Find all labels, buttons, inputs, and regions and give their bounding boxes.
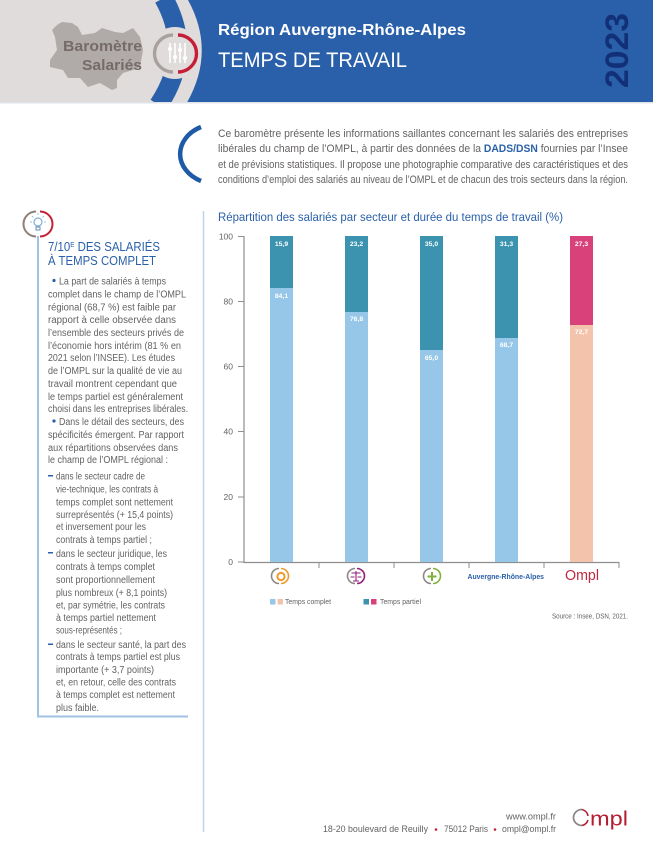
sidebar text: dans le secteur juridique, les — [56, 549, 167, 560]
footer contact — [323, 812, 557, 835]
bar: santé: 65,0 — [425, 355, 438, 362]
header title: theme: TEMPS DE TRAVAIL — [218, 49, 407, 72]
icon: region map — [50, 22, 143, 90]
sidebar text: temps complet sont nettement — [56, 498, 173, 508]
bar chart — [219, 232, 619, 584]
y axis labels: 40 — [224, 426, 233, 436]
legend: Temps complet — [285, 599, 331, 606]
sidebar text: plus faible. — [56, 703, 99, 714]
bar: cadre de vie-technique: 84,1 — [275, 293, 288, 300]
sidebar heading: À TEMPS COMPLET — [48, 253, 156, 268]
sidebar text: importante (+ 3,7 points) — [56, 665, 154, 676]
bar: cadre de vie-technique: 15,9 — [275, 241, 288, 248]
header banner — [0, 0, 653, 105]
y axis labels: 20 — [224, 492, 233, 502]
axes — [238, 236, 619, 568]
sidebar text: sont proportionnellement — [56, 575, 155, 586]
header title: region: Région Auvergne-Rhône-Alpes — [218, 22, 466, 39]
sidebar text: et inversement pour les — [56, 522, 146, 533]
sidebar text: surreprésentés (+ 15,4 points) — [56, 510, 173, 521]
y axis labels: 0 — [228, 557, 233, 567]
y axis labels: 100 — [219, 232, 233, 242]
sidebar text: à temps partiel nettement — [56, 613, 156, 624]
year: 2023 — [599, 13, 635, 88]
sidebar text: le temps partiel est généralement — [48, 392, 183, 403]
legend — [270, 599, 421, 606]
x label: Auvergne-Rhône-Alpes: Auvergne-Rhône-Alpes — [468, 572, 544, 581]
bar: santé — [420, 236, 443, 562]
sidebar text: l’ensemble des secteurs privés de — [48, 328, 185, 339]
intro arc — [180, 127, 201, 181]
sidebar text: rapport à celle observée dans — [48, 315, 176, 326]
footer contact: 75012 Paris — [444, 824, 488, 835]
intro paragraph — [218, 128, 628, 186]
sidebar text: sous-représentés ; — [56, 626, 122, 636]
text: Baromètre Salariés: Salariés — [82, 58, 142, 74]
footer contact: www.ompl.fr — [505, 812, 557, 822]
bar: Auvergne-Rhône-Alpes — [495, 236, 518, 562]
text: Baromètre Salariés — [63, 39, 142, 74]
icon: sector juridique — [348, 568, 365, 584]
sidebar text — [48, 276, 188, 714]
sidebar text: et, par symétrie, les contrats — [56, 600, 165, 612]
icon: sector cadre de vie — [272, 568, 288, 584]
sidebar text: de l’OMPL sur la qualité de vie au — [48, 366, 182, 377]
sidebar text: dans le secteur santé, la part des — [56, 640, 186, 651]
y axis labels: 80 — [224, 296, 233, 306]
OMPL logo: mpl — [590, 808, 628, 830]
bar: OMPL: 27,3 — [575, 241, 588, 248]
icon: barometer emblem — [154, 35, 197, 72]
sidebar text: l’économie hors intérim (81 % en — [48, 341, 181, 352]
sidebar text: complet dans le champ de l’OMPL — [48, 290, 187, 300]
bar: juridique — [345, 236, 368, 562]
OMPL logo — [574, 808, 628, 830]
sidebar heading: E — [70, 242, 75, 249]
sidebar text: Dans le détail des secteurs, des — [59, 417, 184, 428]
sidebar text: 2021 selon l’INSEE). Les études — [48, 353, 175, 364]
sidebar text: vie-technique, les contrats à — [56, 484, 158, 496]
source: Source : Insee, DSN, 2021. — [552, 614, 628, 620]
intro paragraph: libérales du champ de l’OMPL, à partir des données de la DADS/DSN fournies par l’Insee — [218, 143, 628, 155]
sidebar heading: 7/10 — [48, 240, 73, 254]
sidebar text: choisi dans les entreprises libérales. — [48, 404, 188, 415]
sidebar heading: DES SALARIÉS — [74, 239, 160, 254]
sidebar text: travail montrent cependant que — [48, 379, 178, 390]
bar: santé: 35,0 — [425, 241, 438, 248]
bar: OMPL — [570, 236, 593, 562]
column divider — [202, 211, 204, 832]
sidebar text: contrats à temps complet — [56, 562, 155, 573]
icon: sector santé — [424, 568, 441, 584]
bar: juridique: 76,8 — [350, 316, 363, 323]
sidebar text: plus nombreux (+ 8,1 points) — [56, 588, 167, 599]
text: Baromètre Salariés: Baromètre — [63, 39, 142, 55]
sidebar text: dans le secteur cadre de — [56, 472, 145, 482]
sidebar heading — [48, 239, 160, 268]
x label: OMPL logo: Ompl — [565, 567, 599, 584]
y axis labels: 60 — [224, 362, 233, 372]
footer — [323, 808, 628, 835]
chart title: Répartition des salariés par secteur et durée du temps de travail (%) — [218, 210, 563, 224]
sidebar text: à temps complet est nettement — [56, 690, 175, 701]
intro paragraph: Ce baromètre présente les informations saillantes concernant les salariés des entreprises — [218, 128, 628, 140]
bar: Auvergne-Rhône-Alpes: 68,7 — [500, 342, 513, 349]
icon: light bulb — [23, 212, 52, 236]
y axis labels — [219, 232, 233, 567]
panel: sidebar — [23, 212, 188, 716]
legend: Temps partiel — [380, 599, 421, 606]
bar: OMPL: 72,7 — [575, 329, 588, 336]
sidebar text: régional (68,7 %) est faible par — [48, 302, 177, 314]
sidebar text: La part de salariés à temps — [59, 276, 166, 288]
sidebar text: aux répartitions observées dans — [48, 443, 178, 454]
sidebar text: le champ de l’OMPL régional : — [48, 455, 168, 466]
footer contact: ompl@ompl.fr — [502, 824, 557, 835]
sidebar text: et, en retour, celle des contrats — [56, 678, 176, 688]
sidebar text: contrats à temps partiel est plus — [56, 652, 180, 663]
bar: cadre de vie-technique — [270, 236, 293, 562]
bar: juridique: 23,2 — [350, 241, 363, 248]
sidebar text: contrats à temps partiel ; — [56, 535, 152, 546]
bar: Auvergne-Rhône-Alpes: 31,3 — [500, 241, 513, 248]
footer contact: 18-20 boulevard de Reuilly — [323, 824, 428, 835]
sidebar text: spécificités émergent. Par rapport — [48, 430, 184, 441]
